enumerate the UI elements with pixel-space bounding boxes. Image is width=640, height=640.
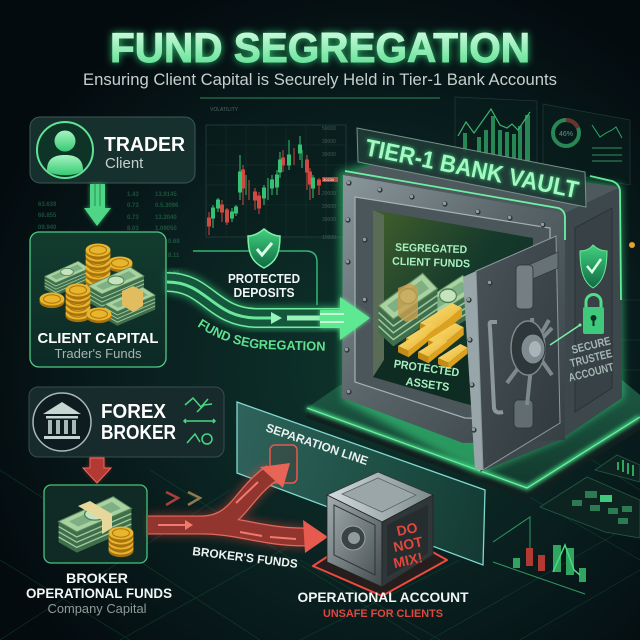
vault side [480,176,622,472]
icon: trader avatar [37,122,93,178]
background data table: 09.940 [38,225,57,231]
label: protected deposits [228,272,300,300]
panel: forex broker: BROKER [101,422,176,444]
panel: trader [30,117,195,183]
background axis numbers: 20000 [322,204,336,210]
background data table: 13.2040 [155,215,177,221]
panel: client capital: Trader's Funds [54,347,142,361]
vault interior [373,210,533,420]
background axis numbers: 10000 [322,235,336,241]
warning text [392,519,425,571]
side label: SECURE [570,335,612,357]
door dial [507,318,552,405]
background data table: 10.2308 [155,168,177,174]
gold bars [398,303,467,369]
warning text: MIX! [392,549,424,571]
background data table: 8.03 [127,226,139,232]
panel: client capital: CLIENT CAPITAL [38,330,158,347]
label: operational account: UNSAFE FOR CLIENTS [323,608,443,620]
warning text: NOT [392,533,425,555]
background axis numbers: 30000 [322,152,336,158]
vault door [463,236,582,470]
vault interior: PROTECTED [393,358,460,380]
side label: ACCOUNT [568,362,615,384]
background data table: 0.5.3096 [155,203,179,209]
background axis numbers: 30000 [322,139,336,145]
vault sign: TIER-1 BANK VAULT [363,134,581,204]
background candlestick chart: VOLATILITY [210,107,239,113]
background panel: bottom right tiles [540,477,640,538]
background panel: line and bars [455,97,537,165]
label: protected deposits: PROTECTED [228,272,300,286]
background chart: bottom right candles [493,517,586,594]
label: brokers funds: BROKER'S FUNDS [192,544,299,571]
background data table [38,168,180,277]
label: broker operational funds: OPERATIONAL FUNDS [26,585,172,601]
arrow: broker funds flow [148,463,328,553]
panel: forex broker: FOREX [101,401,167,423]
icon: broker cash [59,497,133,557]
title: FUND SEGREGATION [110,24,530,71]
background candlestick chart [206,107,346,237]
background data table: 1.43 [127,192,139,198]
panel: trader: TRADER [104,134,186,156]
background axis numbers [322,126,336,241]
vault rivets [344,180,546,395]
cash in vault [379,273,477,346]
vault front frame [342,175,565,443]
panel: trader: Client [105,155,144,172]
background data table: 0.73 [127,203,139,209]
title: FUND SEGREGATION [110,24,530,71]
vault top face [343,158,620,213]
background axis numbers: 30000 [322,217,336,223]
status dot [629,242,635,248]
side label [568,335,615,384]
vault interior: CLIENT FUNDS [392,256,470,270]
label: broker operational funds: BROKER [66,570,128,586]
divider glow [200,97,440,99]
panel: forex broker [29,387,224,457]
door hinges [522,252,558,280]
background data table: 1.09050 [155,226,177,232]
background floor grid [0,300,640,640]
background axis numbers: 50000 [322,126,336,132]
subtitle: Ensuring Client Capital is Securely Held in Tier-1 Bank Accounts [83,70,557,89]
background data table: 0.73 [127,215,139,221]
background candlestick chart: 30230 [323,177,335,182]
red outlined target [270,445,297,483]
background data table: 0.68 [168,239,180,245]
vault [338,128,624,474]
bracket line: protected deposits [193,251,317,305]
icon: protected shield [248,229,280,268]
background data table: 8.11 [168,253,180,259]
label: operational account: OPERATIONAL ACCOUNT [298,589,469,605]
separation glass: SEPARATION LINE [264,421,370,468]
panel: broker operational funds [44,485,147,563]
background panel: small bars [595,455,640,482]
background axis numbers: 20000 [322,191,336,197]
operational safe [313,472,447,596]
vault interior: ASSETS [405,376,450,394]
arrow: trader to capital [84,184,111,226]
background data table: 6.15 [168,271,180,277]
icon: side lock [583,295,604,334]
background panel: donut gauge: 46% [559,131,573,138]
background data table: 63.639 [38,202,57,208]
background panel: donut gauge [543,104,630,185]
background data table: 13.9145 [155,192,177,198]
door handle [490,322,503,412]
vault sign: TIER-1 BANK VAULT [363,134,581,204]
vault interior labels: SEGREGATED [395,242,467,256]
background data table: 1.5019 [127,168,146,174]
label: operational account [298,589,469,620]
warning text: DO [395,519,419,539]
side label: TRUSTEE [569,348,614,370]
separation glass [237,402,485,565]
icon: bank [33,393,91,451]
platform under vault [307,380,640,499]
label: protected deposits: DEPOSITS [234,286,294,300]
panel: client capital [30,232,166,367]
label: fund segregation: FUND SEGREGATION [198,318,325,351]
background data table: 68.855 [38,213,57,219]
icon: broker trading marks [184,398,215,444]
arrow: fund segregation flow [167,282,370,340]
icon: chevrons [166,492,200,505]
icon: cash and coins [40,244,155,326]
icon: side shield [580,245,607,288]
arrow: broker to operational funds [83,458,111,483]
label: broker operational funds [26,570,172,616]
label: broker operational funds: Company Capital [48,602,146,616]
